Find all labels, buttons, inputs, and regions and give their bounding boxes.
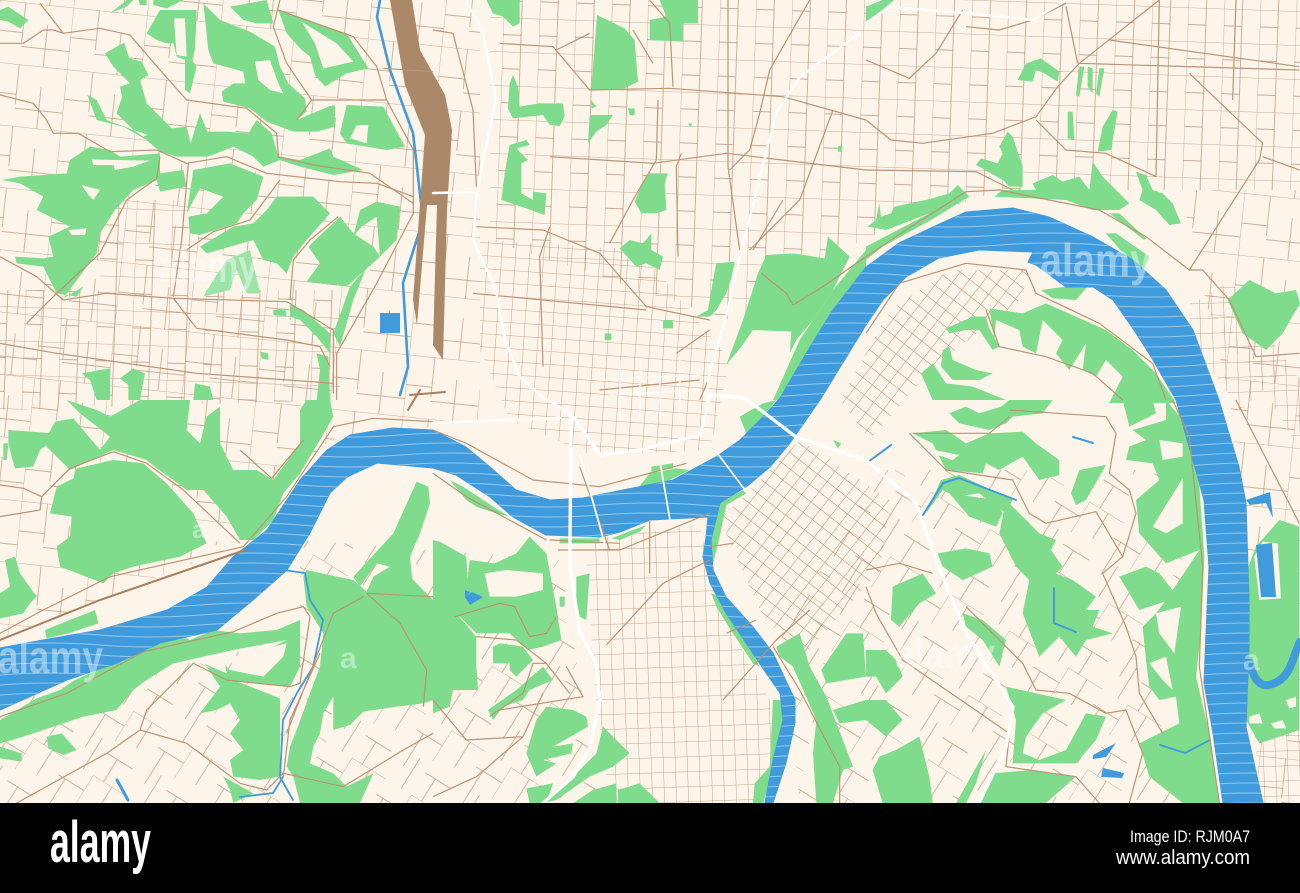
- highways and bridges: [433, 0, 1066, 803]
- rail yard: [0, 0, 452, 640]
- alamy watermarks: a: [340, 642, 357, 675]
- park areas: Devou and Covington: [433, 400, 866, 803]
- arterial roads: south-east: [866, 400, 1299, 803]
- park areas: uptown: [486, 0, 866, 400]
- image id: Image ID: RJM0A7: [1130, 827, 1250, 846]
- black footer bar: [0, 803, 1300, 893]
- site url: www.alamy.com: [1115, 847, 1250, 869]
- alamy watermarks: alamy: [158, 240, 258, 292]
- Ohio and Licking rivers: [0, 208, 1263, 803]
- arterial roads: Covington and Devou: [433, 430, 840, 803]
- alamy watermarks: alamy: [0, 631, 103, 683]
- alamy watermarks: alamy: [1040, 234, 1152, 286]
- arterial roads: east: [866, 0, 1299, 400]
- park areas: north-west hills: [0, 0, 405, 400]
- alamy watermarks: a: [1243, 644, 1260, 677]
- park areas: east and Bellevue hills: [866, 0, 1300, 403]
- alamy watermarks: alamy: [895, 630, 996, 677]
- park areas: south-east hills: [866, 400, 1299, 803]
- alamy watermarks: [0, 234, 1260, 683]
- alamy watermarks: a: [192, 514, 207, 544]
- arterial roads: uptown: [433, 0, 866, 400]
- alamy logo: alamy: [50, 810, 151, 875]
- arterial roads: north-west: [0, 0, 433, 400]
- arterial roads: south-west: [0, 418, 433, 803]
- park areas: south-west hills: [0, 400, 433, 803]
